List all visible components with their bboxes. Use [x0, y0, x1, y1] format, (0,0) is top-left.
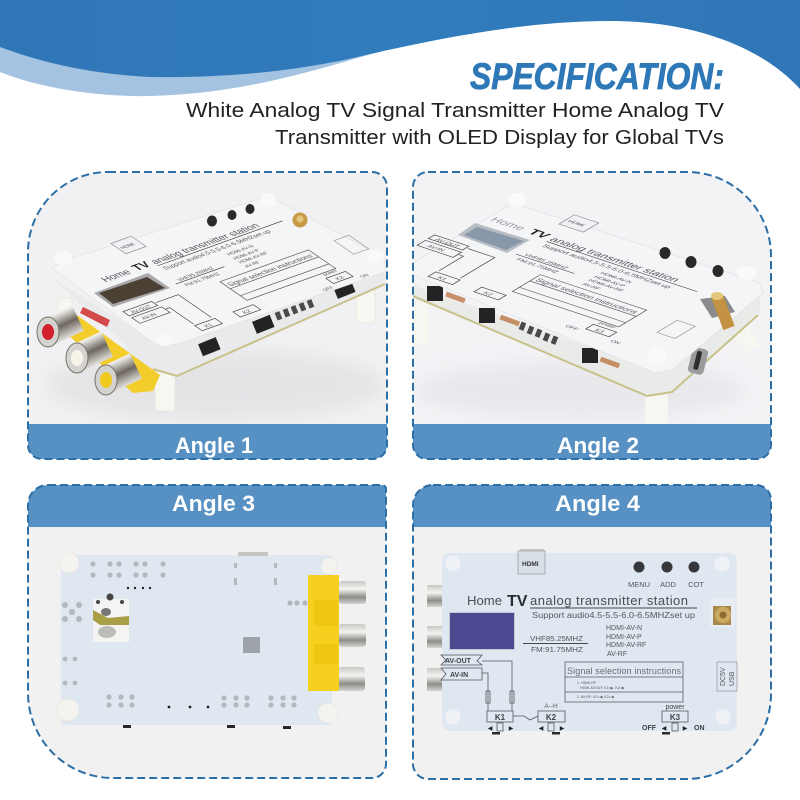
printed plate label: power [596, 321, 617, 330]
mode list [606, 625, 646, 658]
printed plate label: AV-OUT [130, 304, 154, 315]
dashed outline [28, 485, 386, 778]
K3 power switch: OFF [642, 725, 657, 732]
SMA antenna connector [700, 292, 735, 328]
standoffs [58, 288, 375, 411]
K2 switch: ◀ [539, 726, 544, 732]
printed plate label: ON [608, 340, 622, 345]
signal selection box: Signal selection instructions [567, 666, 682, 676]
corner standoff caps [510, 202, 750, 280]
caption bar [28, 424, 387, 460]
frequency text: VHF85.25MHZ [530, 636, 584, 643]
yellow RCA jack [95, 365, 136, 395]
RCA jacks [427, 585, 443, 691]
USB-C port [688, 348, 708, 375]
panel: angle 4 [413, 485, 771, 779]
mode list: HDMI-AV-N [606, 625, 642, 632]
printed plate label: Support audio4.5-5.5-6.0-6.5MHZset up [540, 244, 672, 290]
printed plate label: K1 [435, 276, 449, 282]
OLED window [94, 273, 170, 307]
panel: angle 2 [381, 172, 772, 460]
printed plate label [100, 220, 370, 332]
title: SPECIFICATION: [470, 56, 724, 97]
printed plate label: Home [487, 216, 528, 232]
printed plate label: K2 [481, 291, 495, 297]
board plate [442, 553, 737, 731]
board underside [61, 555, 332, 725]
K1 switch [487, 711, 514, 734]
circuit board [413, 285, 760, 396]
mode list: HDMI-AV-P [606, 634, 642, 641]
buttons [660, 247, 724, 277]
heading on board: Home [467, 593, 502, 608]
DC5V USB label: USB [729, 671, 736, 686]
printed plate label: FM:91.75MHZ [184, 272, 223, 288]
caption: Angle 4 [555, 491, 640, 516]
button labels [628, 580, 704, 589]
acrylic top plate [413, 203, 763, 373]
subtitle: White Analog TV Signal Transmitter Home Analog TV [186, 100, 725, 122]
printed plate label: HDMI-AV-RF [237, 251, 270, 265]
mode list: HDMI-AV-RF [606, 642, 646, 649]
corner standoffs [57, 553, 338, 723]
printed plate label: HDMI [566, 220, 586, 228]
printed plate label: ON [359, 273, 371, 279]
K3 power switch [642, 704, 704, 734]
K2 switch: A--H [544, 703, 558, 710]
caption bar [413, 424, 771, 460]
OLED display [449, 612, 515, 650]
K1 switch: ▶ [509, 726, 514, 732]
printed plate label: power [321, 269, 340, 277]
K3 power switch: ◀ [662, 726, 667, 732]
caption: Angle 3 [172, 491, 255, 516]
printed plate label: FM:91.75MHZ [514, 258, 560, 274]
switch nubs [123, 725, 291, 729]
dashed outline [413, 172, 771, 459]
audio support text: Support audio4.5-5.5-6.0-6.5MHZset up [532, 611, 695, 620]
panel: angle 3 [28, 485, 386, 778]
header wave: dark blue [0, 0, 800, 89]
circuit board [155, 288, 372, 374]
subtitle: Transmitter with OLED Display for Global TVs [275, 127, 724, 149]
HDMI port [518, 549, 545, 574]
yellow jack block [308, 575, 339, 691]
printed plate label [416, 214, 698, 344]
printed plate label: AV-IN [141, 313, 159, 321]
K3 power switch: ON [694, 725, 704, 732]
printed plate label: Support audio4.5-5.5-6.0-6.5MHZset up [161, 229, 273, 271]
signal selection box [565, 662, 683, 702]
signal selection box: HDMI-AVOUT: K1=▶, K2=▶ [580, 686, 626, 690]
AV-OUT and AV-IN labels: AV-IN [450, 672, 468, 679]
K2 switch: ▶ [560, 726, 565, 732]
K2 switch: K2 [546, 713, 557, 722]
frequency text: FM:91.75MHZ [531, 647, 584, 654]
printed plate label: VHF85.25MHZ [522, 253, 570, 270]
printed plate label: AV-RF [243, 260, 262, 269]
yellow jack block [68, 315, 160, 393]
HDMI port: HDMI [522, 561, 539, 568]
solder points [62, 561, 308, 708]
corner standoff caps [54, 193, 384, 346]
K2 switch [538, 703, 565, 734]
signal selection box: 2. AV-RF: K1=◀, K2=◀ [577, 695, 615, 699]
button labels: MENU [628, 580, 650, 589]
switches and pins [198, 280, 356, 356]
printed plate label: TV [128, 259, 154, 273]
caption bar [28, 485, 386, 527]
dashed outline [28, 172, 387, 459]
OLED window [458, 223, 530, 253]
printed plate label: AV-IN [425, 244, 446, 253]
printed plate label: AV-RF [580, 283, 602, 291]
printed plate label: K2 [242, 309, 253, 315]
mode list: AV-RF [607, 651, 627, 658]
heading on board: TV [507, 593, 528, 610]
buttons and antenna [207, 204, 308, 228]
subtitle [186, 100, 725, 149]
printed plate label: Signal selection instructions [225, 252, 315, 288]
printed plate label: HDMI-AV-N [226, 244, 256, 257]
panel: angle 1 [28, 172, 396, 460]
button labels: ADD [660, 580, 676, 589]
printed plate label: Home [98, 268, 134, 284]
printed plate label: K3 [593, 328, 607, 334]
printed plate label: HDMI-AV-P [232, 248, 262, 261]
standoffs [645, 394, 668, 418]
frequency text [523, 636, 588, 654]
AV-OUT and AV-IN labels: AV-OUT [445, 658, 472, 665]
printed plate label: AV-OUT [433, 238, 462, 249]
RCA jacks [338, 581, 366, 691]
switches and pins [427, 286, 598, 363]
printed plate label: HDMI-AV-P [592, 275, 627, 288]
printed plate label: analog transmitter station [149, 222, 263, 266]
K3 power switch: K3 [670, 713, 681, 722]
K1 switch: ◀ [488, 726, 493, 732]
printed plate label: analog transmitter station [546, 236, 682, 284]
printed plate label: HDMI-AV-N [598, 272, 633, 285]
buttons [634, 562, 700, 572]
K3 power switch: ▶ [683, 726, 688, 732]
printed plate label: VHF85.25MHZ [176, 266, 217, 282]
header wave: light band [0, 27, 490, 96]
printed plate label: K3 [335, 276, 346, 282]
dashed outline [413, 485, 771, 779]
printed plate label: HDMI-AV-RF [586, 279, 625, 293]
signal selection box: 1. HDMI-RF [577, 681, 597, 685]
caption bar [413, 485, 771, 527]
heading on board: analog transmitter station [530, 593, 688, 608]
grey chip pad [243, 637, 260, 653]
corner standoffs [445, 555, 731, 725]
printed plate label: K1 [203, 323, 215, 329]
caption: Angle 1 [175, 433, 253, 458]
printed plate label: Signal selection instructions [533, 277, 640, 315]
printed plate label: OFF [321, 286, 336, 293]
printed plate label: TV [525, 227, 554, 240]
DC5V USB label [717, 662, 737, 691]
AV-OUT and AV-IN labels [441, 655, 538, 720]
K1 switch: K1 [495, 713, 506, 722]
white repair patch [93, 594, 129, 642]
DC5V USB label: DC5V [720, 667, 727, 686]
K3 power switch: power [665, 704, 685, 711]
caption: Angle 2 [557, 433, 639, 458]
printed plate label: OFF [563, 325, 580, 332]
red RCA jack [37, 317, 78, 347]
button labels: COT [688, 580, 704, 589]
SMA connector [710, 598, 735, 627]
heading on board [467, 593, 688, 610]
white RCA jack [66, 343, 107, 373]
printed plate label: HDMI [119, 242, 137, 250]
acrylic top plate [52, 198, 385, 346]
